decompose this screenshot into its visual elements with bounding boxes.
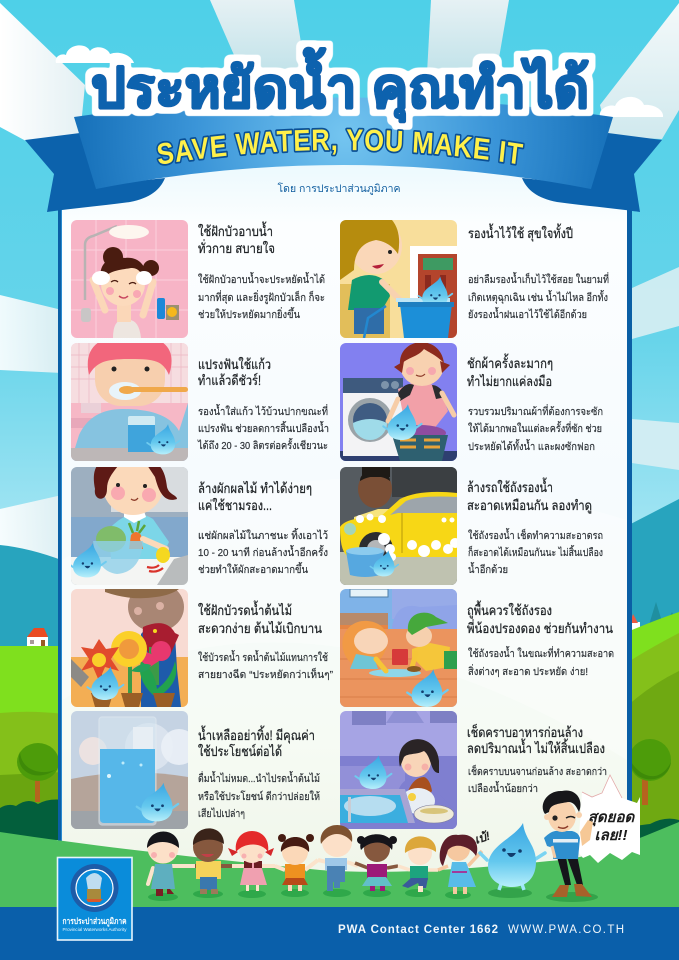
kids holding hands: [147, 825, 482, 901]
kid 4: [275, 834, 318, 897]
card 10 text: เช็ดคราบบนจานก่อนล้าง สะอาดกว่า: [468, 764, 607, 778]
card 9 heading: พี่น้องปรองดอง ช่วยกันทำงาน: [467, 619, 613, 636]
card 1 text: ใช้ฝักบัวอาบน้ำจะประหยัดน้ำได้: [198, 272, 325, 286]
card 1 heading: [198, 221, 275, 256]
card 3 illustration: washing vegetables: [69, 458, 188, 585]
PWA logo: การประปาส่วนภูมิภาค: [62, 916, 127, 927]
card 7 text: ให้ได้มากพอในแต่ละครั้งที่ซัก ช่วย: [468, 421, 602, 435]
card 4 text: สายยางฉีด “ประหยัดกว่าเห็นๆ”: [198, 667, 333, 681]
card 7 heading: ชักผ้าครั้งละมากๆ: [467, 353, 553, 371]
card 4 heading: ใช้ฝักบัวรดน้ำต้นไม้: [198, 600, 292, 618]
PWA logo: Provincial Waterworks Authority: [62, 927, 127, 932]
card 8 text: น้ำอีกด้วย: [468, 562, 508, 576]
card 6 illustration: storing water: [340, 218, 457, 338]
card 1 heading: ใช้ฝักบัวอาบน้ำ: [198, 221, 273, 239]
card 6 text: ยังรองน้ำฝนเอาไว้ใช้ได้อีกด้วย: [468, 307, 587, 321]
card 4 heading: [198, 600, 322, 636]
banner left tail: [25, 133, 165, 212]
card 5 heading: น้ำเหลืออย่าทิ้ง! มีคุณค่า: [198, 725, 315, 744]
clouds: [56, 45, 663, 117]
card 10 heading: เช็ดคราบอาหารก่อนล้าง: [467, 723, 583, 740]
trees: [17, 739, 671, 805]
card 8 heading: สะอาดเหมือนกัน ลองทำดู: [467, 498, 592, 514]
card 7 text: ประหยัดได้ทั้งน้ำ และผงซักฟอก: [468, 439, 595, 453]
card 3 text: 10 - 20 นาที ก่อนล้างน้ำอีกครั้ง: [198, 545, 328, 559]
card 3 text: แช่ผักผลไม้ในภาชนะ ทิ้งเอาไว้: [198, 528, 328, 542]
hills: right: [625, 612, 679, 836]
card 8 heading: [467, 477, 592, 514]
speech bubble: [578, 775, 640, 863]
PWA staff man character: [543, 791, 598, 902]
card 3 heading: [198, 481, 312, 513]
kid 7: [398, 836, 438, 897]
card 5 illustration: glass of water: [71, 711, 197, 829]
small house on the right: [630, 614, 640, 631]
card 1 text: มากที่สุด และยิ่งรูฝักบัวเล็ก ก็จะ: [198, 290, 325, 304]
speech bubble: สุดยอด: [588, 809, 635, 827]
card 2 text: [197, 404, 329, 452]
card 6 text: [468, 272, 609, 321]
card 1 text: ช่วยให้ประหยัดมากยิ่งขึ้น: [198, 307, 300, 321]
card 9 text: [468, 646, 614, 678]
title: ประหยัดน้ำ คุณทำได้: [91, 48, 589, 123]
card 2 text: แปรงฟัน ช่วยลดการสิ้นเปลืองน้ำ: [198, 421, 329, 435]
card 5 text: ดื่มน้ำไม่หมด...นำไปรดน้ำต้นไม้: [198, 771, 320, 785]
card 10 text: [468, 764, 607, 795]
card 5 heading: [198, 725, 315, 759]
card 5 text: หรือใช้ประโยชน์ ดีกว่าปล่อยให้: [198, 790, 320, 803]
card 7 illustration: laundry: [340, 342, 457, 461]
card 8 text: ใช้ถังรองน้ำ เช็ดทำความสะอาดรถ: [468, 528, 603, 542]
card 6 text: อย่าลืมรองน้ำเก็บไว้ใช้สอย ในยามที่: [468, 272, 609, 286]
mascot water drop: [480, 823, 545, 898]
card 2 illustration: brushing teeth: [71, 335, 188, 461]
card 2 text: รองน้ำใส่แก้ว ไว้บ้วนปากขณะที่: [198, 404, 328, 418]
card 8 text: ก็สะอาดได้เหมือนกันนะ ไม่สิ้นเปลือง: [468, 545, 603, 559]
card 5 text: [198, 771, 320, 820]
footer band: [0, 907, 679, 960]
sun rays: [0, 0, 679, 560]
banner main arc: [74, 98, 613, 189]
card 7 heading: [467, 353, 553, 389]
card 5 heading: ใช้ประโยชน์ต่อได้: [198, 743, 282, 759]
contact text: PWA Contact Center 1662: [338, 924, 498, 936]
card 8 illustration: car wash: [340, 467, 460, 585]
card 6 text: เกิดเหตุฉุกเฉิน เช่น น้ำไม่ไหล อีกทั้ง: [468, 290, 608, 304]
card 8 text: [468, 528, 603, 576]
pine trees on the right: [648, 602, 679, 628]
speech bubble: เลย!!: [594, 827, 628, 844]
subtitle: SAVE WATER, YOU MAKE IT: [156, 128, 525, 166]
card 2 heading: [198, 356, 271, 388]
kid 3: [228, 831, 275, 898]
mountains: [0, 499, 679, 660]
card 7 text: [468, 404, 603, 453]
contact text: [338, 924, 624, 936]
kid 2: [193, 828, 232, 898]
card 2 heading: แปรงฟันใช้แก้ว: [198, 356, 271, 372]
ground: [0, 822, 679, 910]
card 7 text: รวบรวมปริมาณผ้าที่ต้องการจะซัก: [468, 404, 603, 418]
card 4 heading: สะดวกง่าย ต้นไม้เบิกบาน: [198, 621, 322, 636]
kid 5: [318, 825, 358, 897]
card 3 text: [198, 528, 328, 576]
main white panel: [58, 150, 632, 890]
card 10 heading: ลดปริมาณน้ำ ไม่ให้สิ้นเปลือง: [467, 738, 605, 756]
card 9 heading: ถูพื้นควรใช้ถังรอง: [467, 600, 552, 619]
card 4 illustration: watering plants: [71, 582, 188, 707]
card 3 heading: แค่ใช้ชามรอง...: [198, 497, 272, 513]
card 2 text: ได้ถึง 20 - 30 ลิตรต่อครั้งเชียวนะ: [197, 438, 328, 452]
card 2 heading: ทำแล้วดีชัวร์!: [198, 372, 261, 388]
hills: left: [0, 646, 64, 836]
card 6 heading: รองน้ำไว้ใช้ สุขใจทั้งปี: [468, 223, 573, 242]
PWA logo: [58, 858, 132, 940]
banner right tail: [522, 133, 662, 212]
card 1 illustration: shower: [71, 220, 188, 338]
card 10 text: เปลืองน้ำน้อยกว่า: [468, 781, 538, 795]
card 9 text: สิ่งต่างๆ สะอาด ประหยัด ง่าย!: [468, 664, 588, 678]
card 9 text: ใช้ถังรองน้ำ ในขณะที่ทำความสะอาด: [468, 646, 614, 660]
contact text: WWW.PWA.CO.TH: [508, 924, 624, 936]
kid 6: [355, 834, 398, 897]
card 10 illustration: wiping dishes: [340, 711, 457, 829]
card 3 text: ช่วยทำให้ผักสะอาดมากขึ้น: [198, 562, 308, 576]
byline: โดย การประปาส่วนภูมิภาค: [278, 182, 400, 195]
card 9 heading: [467, 600, 613, 636]
kid 1: [147, 832, 195, 901]
card 8 heading: ล้างรถใช้ถังรองน้ำ: [467, 477, 553, 495]
hedges: [0, 800, 679, 850]
speech: be: เบ้!: [473, 829, 492, 847]
house on hill: [27, 628, 48, 647]
card 1 heading: ทั่วกาย สบายใจ: [198, 239, 275, 256]
card 10 heading: [467, 723, 605, 756]
card 4 text: ใช้บัวรดน้ำ รดน้ำต้นไม้แทนการใช้: [198, 650, 328, 664]
banner: [25, 98, 662, 212]
card 3 heading: ล้างผักผลไม้ ทำได้ง่ายๆ: [198, 481, 312, 496]
kid 8: [438, 835, 482, 899]
card 7 heading: ทำไม่ยากแค่ลงมือ: [467, 374, 552, 389]
card 5 text: เสียไปเปล่าๆ: [198, 807, 245, 820]
card 1 text: [198, 272, 325, 321]
card 9 illustration: mopping floor: [340, 589, 457, 707]
card 4 text: [198, 650, 333, 681]
